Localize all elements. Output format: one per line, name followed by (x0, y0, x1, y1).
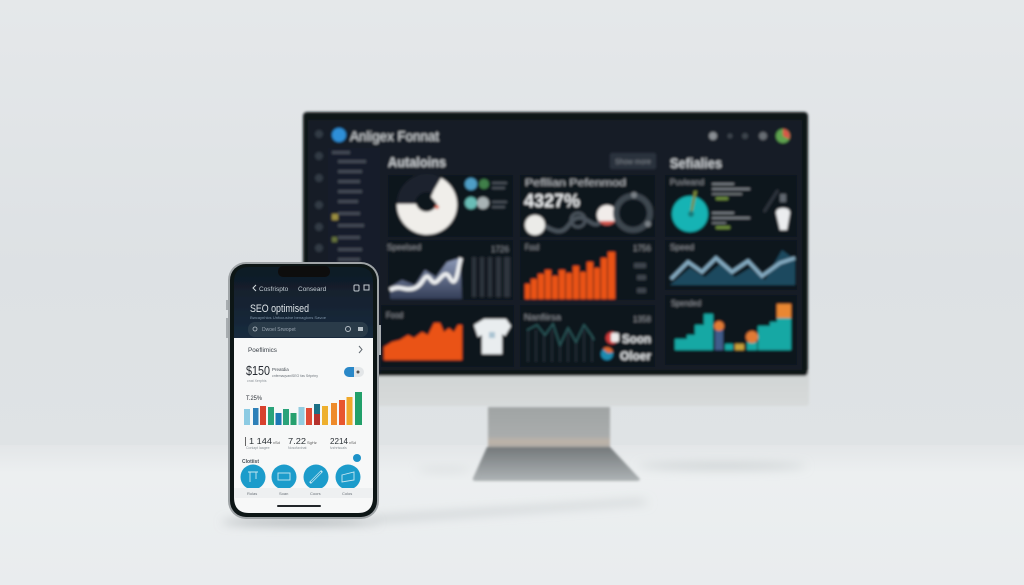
stat: third: fzzhrtsuals (330, 446, 347, 450)
show more button: Show more (615, 159, 651, 166)
monitor stand neck (488, 407, 610, 447)
navigation bar (253, 285, 369, 293)
panel: teal stacked bars (665, 295, 797, 365)
panel: teal pie (665, 175, 797, 237)
phone content area (234, 338, 373, 513)
icon: shortcut two (272, 464, 296, 490)
search bar (248, 322, 368, 337)
section heading: Autaloins: Autaloins (388, 154, 446, 170)
phone subtitle: Bwcaynhics Unfocusine benaglons Savoe (250, 315, 327, 320)
monitor shadow on desk (638, 463, 806, 469)
panel: line chart and legend (520, 305, 655, 367)
toggle switch (344, 367, 364, 377)
bar chart: T.25% (246, 395, 262, 402)
panel: performance gauge: 4327% (524, 191, 580, 211)
icon: shortcut one (240, 464, 266, 490)
tab bar: Soan (279, 491, 288, 496)
monitor shadow on desk, left (417, 468, 473, 472)
navigation bar: Cosfrispto (259, 286, 289, 293)
show more button (610, 153, 656, 169)
panel: area chart: 1726 (491, 245, 509, 254)
panel: teal pie: Puvleand (670, 178, 704, 187)
panel: performance gauge (520, 175, 655, 237)
panel: area chart: Speelsed (387, 243, 421, 252)
stat: second: 7.22 (288, 436, 306, 446)
home indicator (277, 505, 321, 507)
stat: first: 1 144 (249, 436, 272, 446)
panel: line chart and legend: Oloer (620, 349, 651, 363)
monitor chin (304, 370, 809, 406)
panel: performance gauge: Pefllian Pefenmod (525, 178, 626, 189)
stat: first (245, 436, 280, 450)
panel: orange area bars and t-shirt: Food (386, 311, 403, 320)
price stat: cnat Xerphis (247, 379, 267, 383)
stat: third: 2214 (330, 436, 348, 446)
tab bar: Colos (342, 491, 352, 496)
phone body (228, 262, 379, 519)
phone side buttons (226, 300, 381, 355)
stat: second (288, 436, 317, 450)
stat: second: SgHz (307, 440, 317, 445)
panel: area chart (387, 240, 513, 300)
panel: wave chart: Speed (670, 243, 694, 252)
price stat: Preatdia (272, 367, 289, 372)
notification badge (353, 454, 361, 462)
phone shadow on desk (372, 500, 650, 522)
price stat: cnfemaqvaniSEO fas Srtpriny (272, 374, 318, 378)
card heading: Poeflimics (248, 347, 278, 354)
panel: orange bar chart: 1756 (633, 244, 651, 253)
panel: line chart and legend: Nanfiirsa (524, 313, 562, 322)
stat: third: vSd (349, 440, 356, 445)
dashboard title: Anligex Fonnat (350, 128, 439, 144)
price stat (246, 364, 318, 383)
dashboard logo icon (332, 128, 346, 142)
bar chart (244, 392, 362, 425)
panel: orange area bars and t-shirt (381, 305, 514, 367)
sidebar (315, 130, 380, 373)
tab bar: Rolas (247, 491, 257, 496)
panel: teal stacked bars: Spended (671, 299, 701, 308)
section heading: Sefialies: Sefialies (670, 155, 722, 171)
monitor stand base (473, 447, 640, 481)
shortcuts heading: Clotiist (242, 459, 259, 465)
panel: line chart and legend: 1358 (633, 315, 651, 324)
price stat: $150 (246, 364, 270, 378)
phone notch (278, 266, 330, 277)
monitor screen (303, 112, 808, 376)
navigation bar: Conseard (298, 286, 327, 293)
desk surface (0, 445, 1024, 585)
stat: third (330, 436, 356, 450)
monitor (303, 112, 809, 481)
tab bar: Coors (310, 491, 321, 496)
top bar icons (709, 129, 790, 143)
phone heading: SEO optimised (250, 303, 309, 315)
icon: shortcut four (336, 464, 360, 490)
phone (226, 262, 381, 519)
stat: first: Coniapt laagee (246, 446, 270, 450)
card heading (248, 346, 362, 354)
panel: line chart and legend: Soon (622, 332, 651, 346)
stat: first: vSd (273, 440, 280, 445)
tab bar (234, 488, 373, 498)
panel: wave chart (665, 240, 797, 290)
stat: second: Nosofavinat (288, 446, 307, 450)
icon: shortcut three (304, 464, 328, 490)
background wall (0, 0, 1024, 446)
panel: orange bar chart: Fssd (525, 243, 539, 252)
panel: donut chart (388, 175, 513, 237)
panel: orange bar chart (520, 240, 655, 300)
search bar: Dwoel Srwopet (262, 327, 296, 333)
phone screen header (234, 267, 373, 340)
